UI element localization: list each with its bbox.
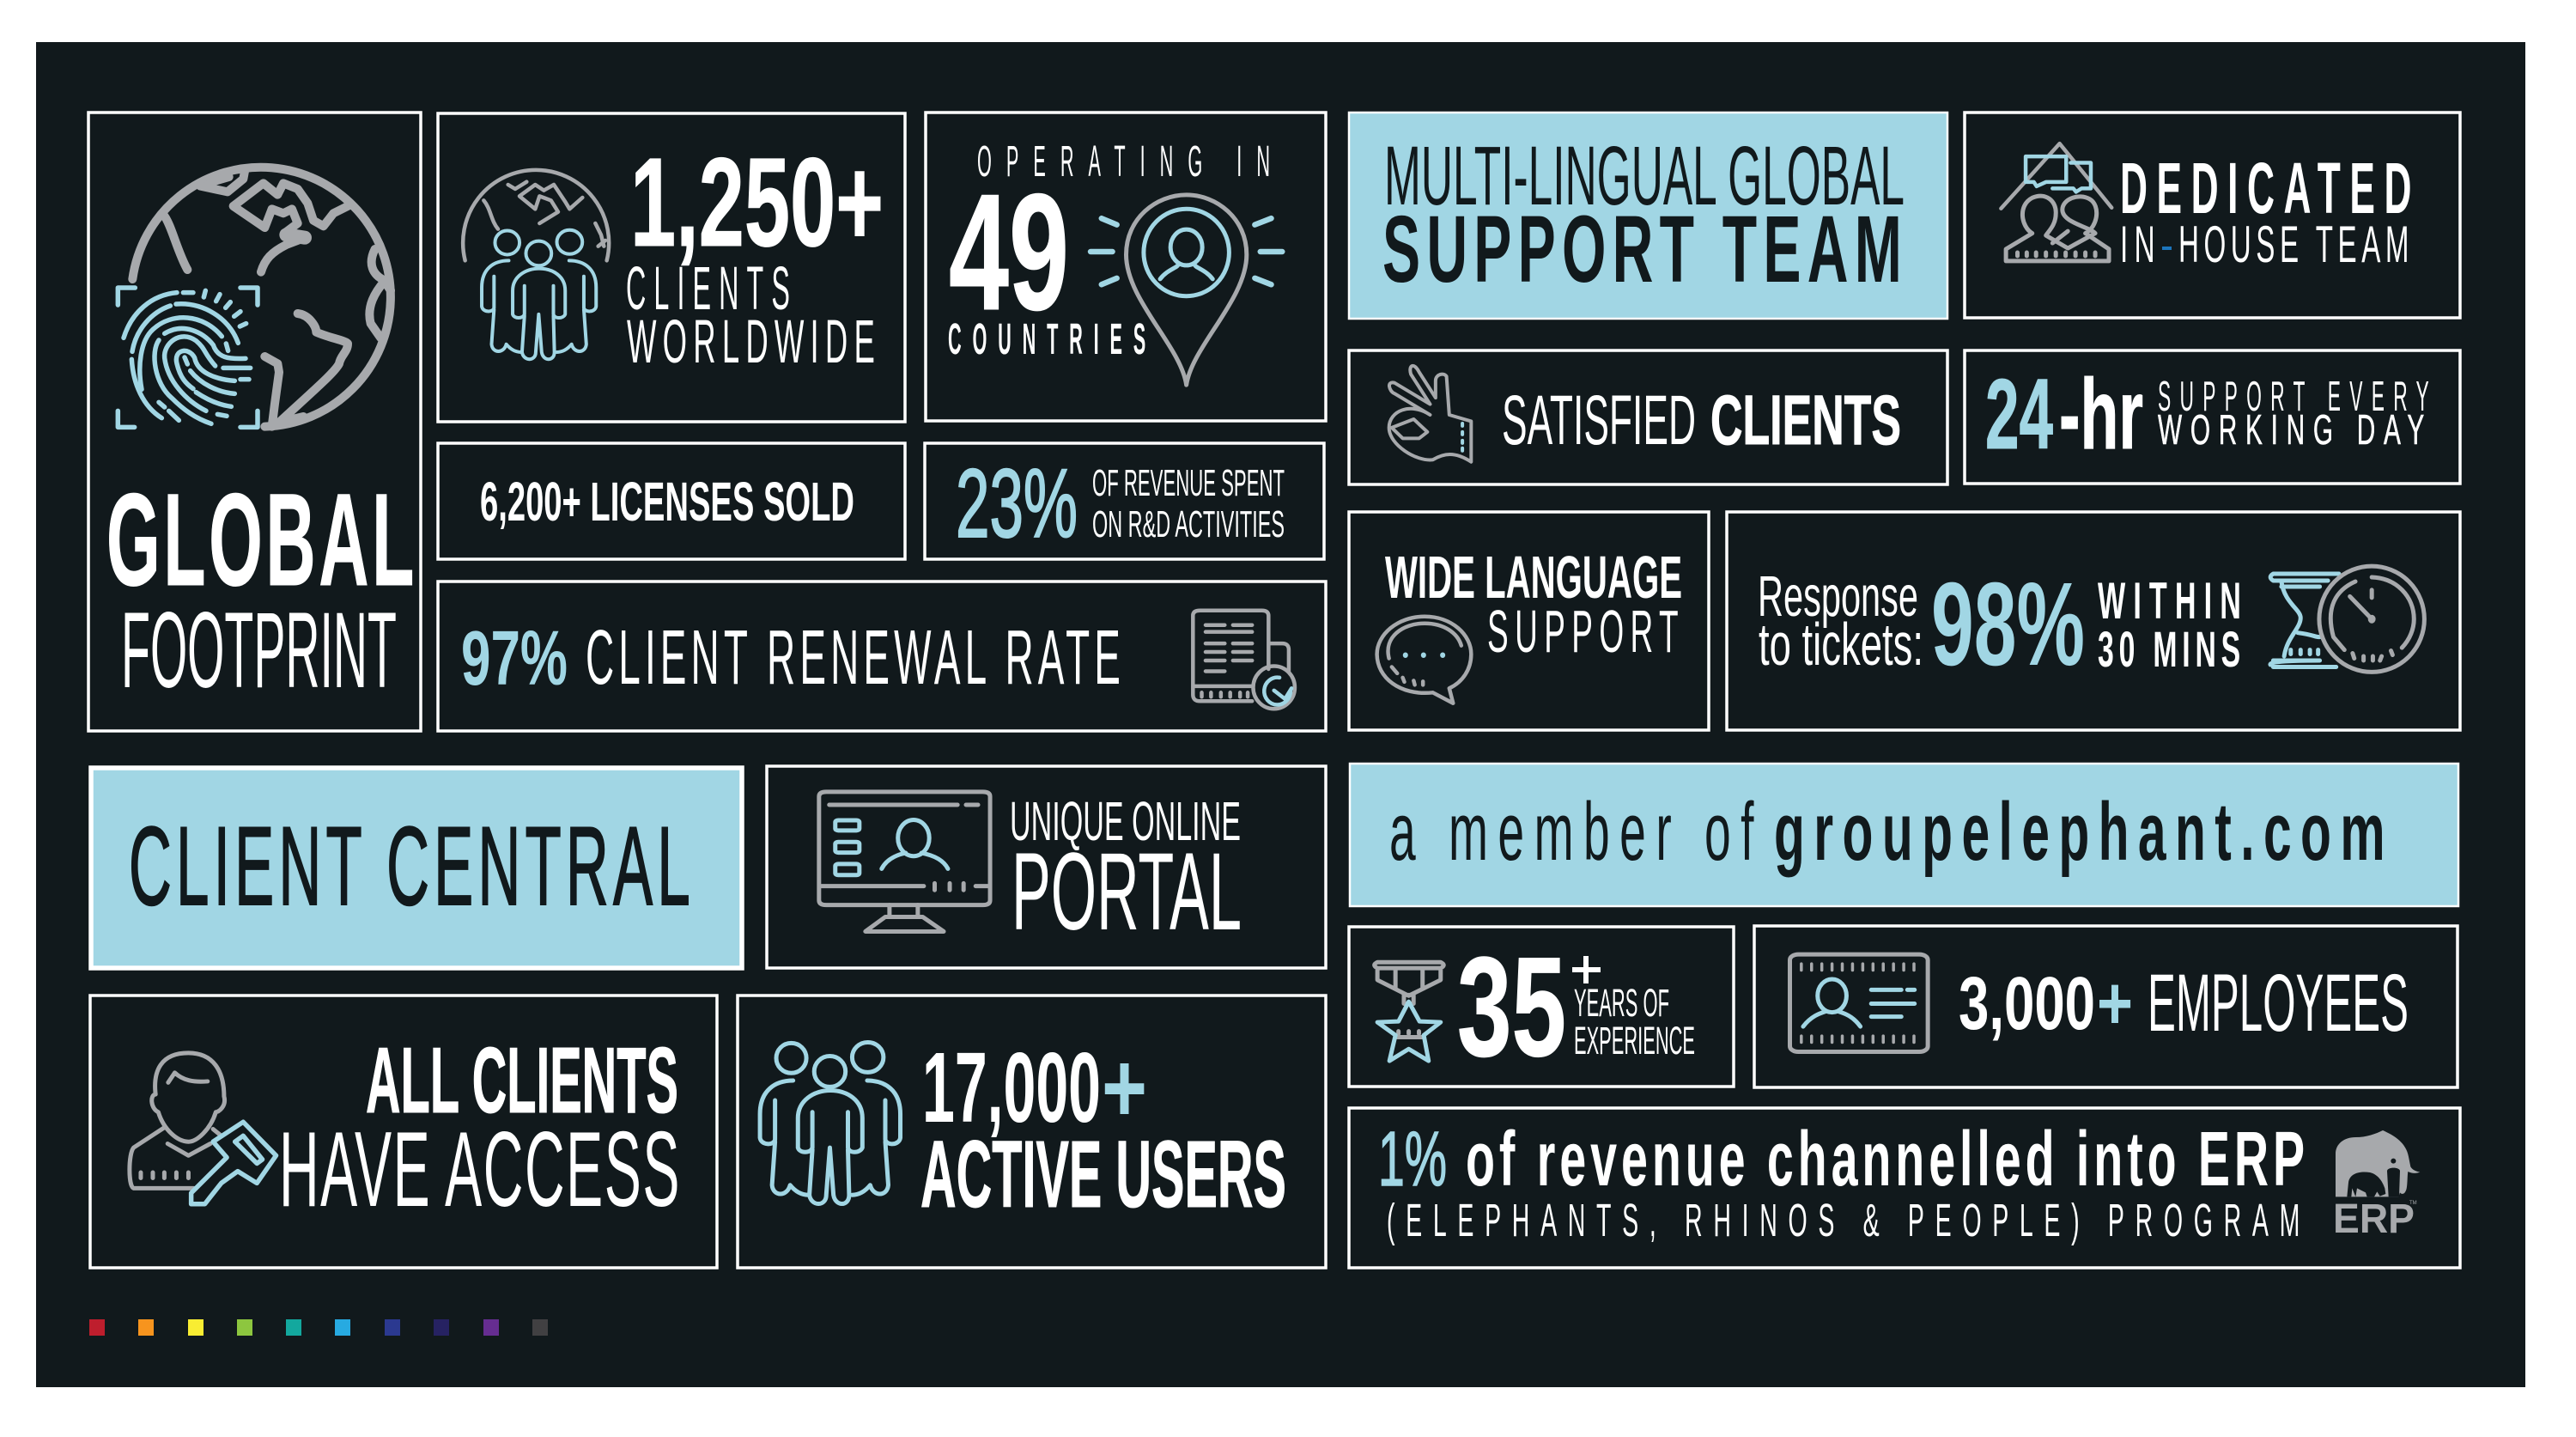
text: 30 mins: 30 MINS <box>2098 622 2245 678</box>
text: 6,200+ licenses sold: 6,200+ LICENSES SOLD <box>480 471 854 533</box>
text: satisfied: SATISFIED <box>1502 381 1696 460</box>
heading: support team: SUPPORT TEAM <box>1382 197 1908 302</box>
heading: have access: HAVE ACCESS <box>279 1111 681 1229</box>
text: within: WITHIN <box>2098 572 2249 630</box>
text: to tickets: to tickets: <box>1759 611 1923 678</box>
panel: 1% ERP program <box>1349 1108 2460 1268</box>
stat: 49: 49 <box>949 159 1069 344</box>
panel: wide language support <box>1349 512 1709 730</box>
stat: plus <box>1572 956 1601 983</box>
panel: all clients have access <box>90 996 717 1268</box>
panel: 3,000+ employees <box>1754 926 2458 1087</box>
icon: hourglass and clock <box>2270 566 2424 672</box>
icon: document <box>1193 611 1295 709</box>
panel: 49 countries <box>926 113 1326 421</box>
icon: globe with fingerprint <box>118 167 391 427</box>
icon: people and globe <box>463 170 609 359</box>
text: ERP: ERP <box>2333 1196 2415 1242</box>
icon: man with key <box>130 1053 276 1204</box>
panel: response to tickets <box>1727 512 2460 730</box>
panel: global footprint <box>88 113 421 731</box>
stat: 3,000: 3,000 <box>1959 962 2095 1045</box>
text: unique online: UNIQUE ONLINE <box>1010 790 1241 852</box>
panel: 49 countries: COUNTRIES <box>948 314 1157 363</box>
text: trademark: TM <box>2409 1201 2417 1206</box>
icon: ok hand <box>1389 366 1471 462</box>
stat: 1%: 1% <box>1378 1117 1447 1203</box>
stat: 98%: 98% <box>1931 558 2085 691</box>
colour swatches <box>89 1319 548 1336</box>
stat: -hr: -hr <box>2059 358 2143 470</box>
icon: monitor <box>819 792 990 931</box>
stat: 97%: 97% <box>461 616 568 702</box>
panel: online portal <box>767 766 1326 968</box>
icon: map pin <box>1091 195 1282 385</box>
stat: 23%: 23% <box>956 449 1078 557</box>
icon: speech bubble <box>1377 617 1471 703</box>
heading: wide language: WIDE LANGUAGE <box>1385 544 1682 611</box>
heading: multi-lingual global: MULTI-LINGUAL GLOBAL <box>1384 129 1905 222</box>
text: response: Response <box>1758 564 1918 629</box>
panel: 35+ years <box>1349 927 1734 1087</box>
panel: 1,250+ clients: CLIENTS <box>626 255 798 323</box>
stat: 35: 35 <box>1457 928 1566 1086</box>
panel: client central <box>91 768 742 968</box>
icon: medal <box>1375 962 1443 1061</box>
text: client renewal rate: CLIENT RENEWAL RATE <box>586 615 1125 701</box>
heading: portal: PORTAL <box>1012 831 1242 953</box>
icon: ERP elephant logo <box>2333 1130 2420 1242</box>
text: a member of: a member of <box>1389 786 1764 878</box>
text: FOOTPRINT <box>121 591 397 710</box>
heading: client central: CLIENT CENTRAL <box>129 803 695 929</box>
icon: people <box>760 1042 901 1204</box>
text: on R&D activities: ON R&D ACTIVITIES <box>1092 503 1285 545</box>
stat: 24: 24 <box>1985 358 2053 470</box>
panel: dedicated team <box>1965 113 2460 318</box>
text: in-house team <box>2120 216 2414 273</box>
panel: 23% revenue <box>925 443 1324 559</box>
text: clients bold: CLIENTS <box>1710 381 1901 460</box>
heading: GLOBAL: GLOBAL <box>106 466 417 613</box>
panel: active users <box>738 996 1326 1268</box>
panel: satisfied clients <box>1349 350 1947 484</box>
panel: 97% renewal <box>438 581 1326 731</box>
icon: team house <box>2001 143 2111 261</box>
panel: licenses sold <box>438 443 905 559</box>
stat: plus: + <box>2097 962 2133 1045</box>
heading: all clients: ALL CLIENTS <box>366 1028 678 1133</box>
text: in-house team: IN <box>2120 216 2161 273</box>
stat: plus: + <box>1102 1032 1147 1143</box>
stat: 1,250+: 1,250+ <box>630 132 884 273</box>
text: support: SUPPORT <box>1487 598 1685 665</box>
panel: multi-lingual support team <box>1349 113 1947 319</box>
stat: 17,000: 17,000 <box>922 1032 1101 1143</box>
panel: group elephant member <box>1350 764 2458 906</box>
panel: 1,250+ clients <box>438 113 905 422</box>
panel: 24-hr support <box>1965 350 2460 484</box>
text: of revenue spent: OF REVENUE SPENT <box>1092 462 1285 504</box>
icon: id card <box>1789 954 1928 1052</box>
heading: active users: ACTIVE USERS <box>920 1122 1286 1227</box>
panel: 35+ years: EXPERIENCE <box>1574 1019 1695 1063</box>
panel: 35+ years: YEARS OF <box>1574 981 1669 1025</box>
text: OPERATING IN <box>977 137 1285 186</box>
text: worldwide: WORLDWIDE <box>627 308 881 376</box>
